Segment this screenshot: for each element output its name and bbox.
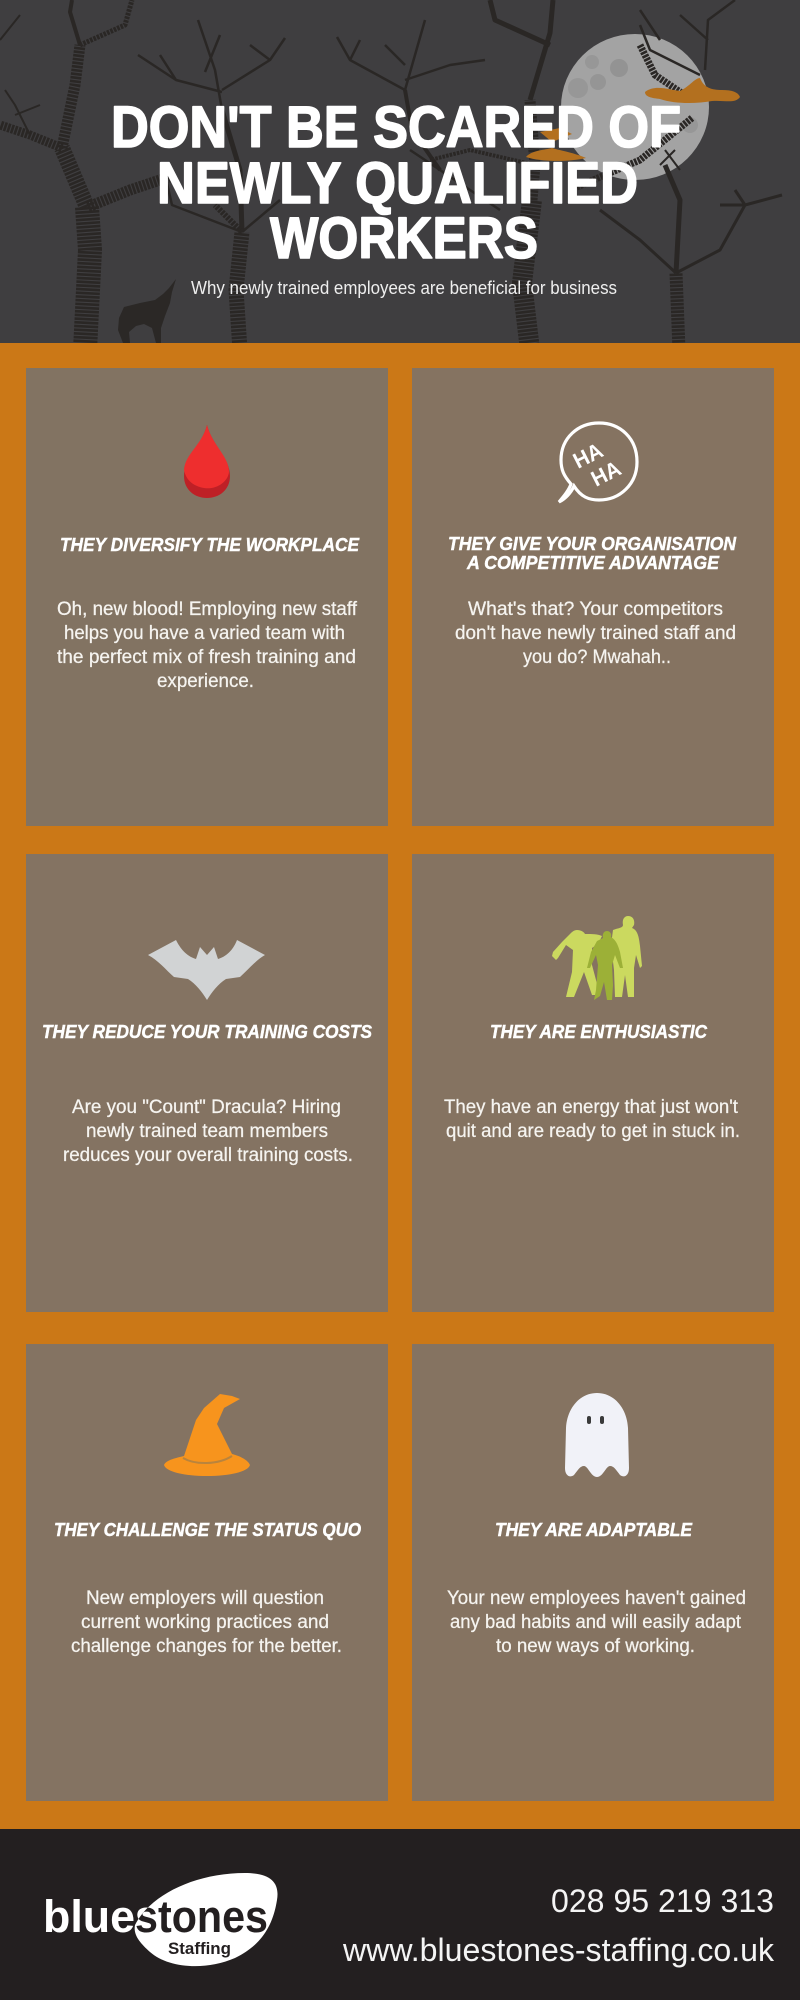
heading: THEY ARE ENTHUSIASTIC: [490, 1022, 708, 1042]
icon: haha speech bubble: [559, 423, 637, 502]
logo: bluestones staffing: stones: [135, 1891, 268, 1942]
logo: bluestones staffing: Staffing: [168, 1939, 231, 1958]
body text: Oh, new blood! Employing new staff: [57, 599, 358, 620]
icon: haha speech bubble: HA: [587, 456, 625, 491]
heading: THEY REDUCE YOUR TRAINING COSTS: [42, 1022, 372, 1042]
panel: adaptable: [412, 1344, 774, 1801]
icon: haha speech bubble: HA: [569, 438, 607, 473]
icon: blood drop: [184, 425, 230, 498]
logo: bluestones staffing: stones: [135, 1891, 268, 1942]
body text: They have an energy that just won't: [444, 1097, 739, 1118]
body text: [57, 599, 358, 692]
logo: bluestones staffing: blue: [43, 1891, 135, 1942]
body text: [455, 599, 736, 668]
heading: [448, 534, 737, 573]
body text: any bad habits and will easily adapt: [450, 1612, 742, 1633]
body text: [63, 1097, 353, 1166]
heading: THEY ARE ADAPTABLE: [495, 1520, 693, 1540]
body text: to new ways of working.: [496, 1636, 695, 1657]
body text: you do? Mwahah..: [523, 647, 671, 668]
bare trees: [0, 0, 782, 350]
body text: New employers will question: [86, 1588, 324, 1609]
body text: [447, 1588, 746, 1657]
panel: challenge the status quo: [26, 1344, 388, 1801]
body text: Your new employees haven't gained: [447, 1588, 746, 1609]
body text: challenge changes for the better.: [71, 1636, 342, 1657]
body text: Are you "Count" Dracula? Hiring: [72, 1097, 341, 1118]
body text: helps you have a varied team with: [64, 623, 345, 644]
panel: competitive advantage: [412, 368, 774, 826]
website: www.bluestones-staffing.co.uk: [342, 1932, 775, 1968]
body text: What's that? Your competitors: [468, 599, 723, 620]
header panel: [0, 0, 800, 350]
heading: THEY DIVERSIFY THE WORKPLACE: [60, 535, 360, 555]
icon: howling wolf: [118, 279, 176, 343]
body text: [71, 1588, 342, 1657]
body text: newly trained team members: [86, 1121, 328, 1142]
logo: bluestones staffing: [43, 1873, 278, 1966]
moon: [561, 34, 709, 180]
body text: quit and are ready to get in stuck in.: [446, 1121, 740, 1142]
heading: THEY CHALLENGE THE STATUS QUO: [54, 1520, 361, 1540]
body text: [444, 1097, 740, 1142]
icon: ghost: [565, 1393, 629, 1477]
icon: bat: [148, 940, 265, 1000]
panel: enthusiastic: [412, 854, 774, 1312]
heading: THEY GIVE YOUR ORGANISATION: [448, 534, 737, 554]
panel: they diversify the workplace: [26, 368, 388, 826]
body text: don't have newly trained staff and: [455, 623, 736, 644]
orange bats across the moon: [526, 78, 740, 161]
title: DON'T BE SCARED OF: [111, 95, 681, 160]
phone number: 028 95 219 313: [551, 1883, 774, 1919]
body text: experience.: [157, 671, 254, 692]
icon: witch hat: [164, 1394, 250, 1476]
panel: reduce training costs: [26, 854, 388, 1312]
icon: zombies: [552, 916, 642, 1000]
title: WORKERS: [270, 206, 538, 271]
footer: [0, 1829, 800, 2000]
title: [111, 95, 681, 271]
title: NEWLY QUALIFIED: [157, 151, 638, 216]
heading: A COMPETITIVE ADVANTAGE: [466, 553, 720, 573]
subtitle: Why newly trained employees are beneficial for business: [191, 278, 617, 298]
body text: current working practices and: [81, 1612, 329, 1633]
body text: the perfect mix of fresh training and: [57, 647, 356, 668]
body text: reduces your overall training costs.: [63, 1145, 353, 1166]
